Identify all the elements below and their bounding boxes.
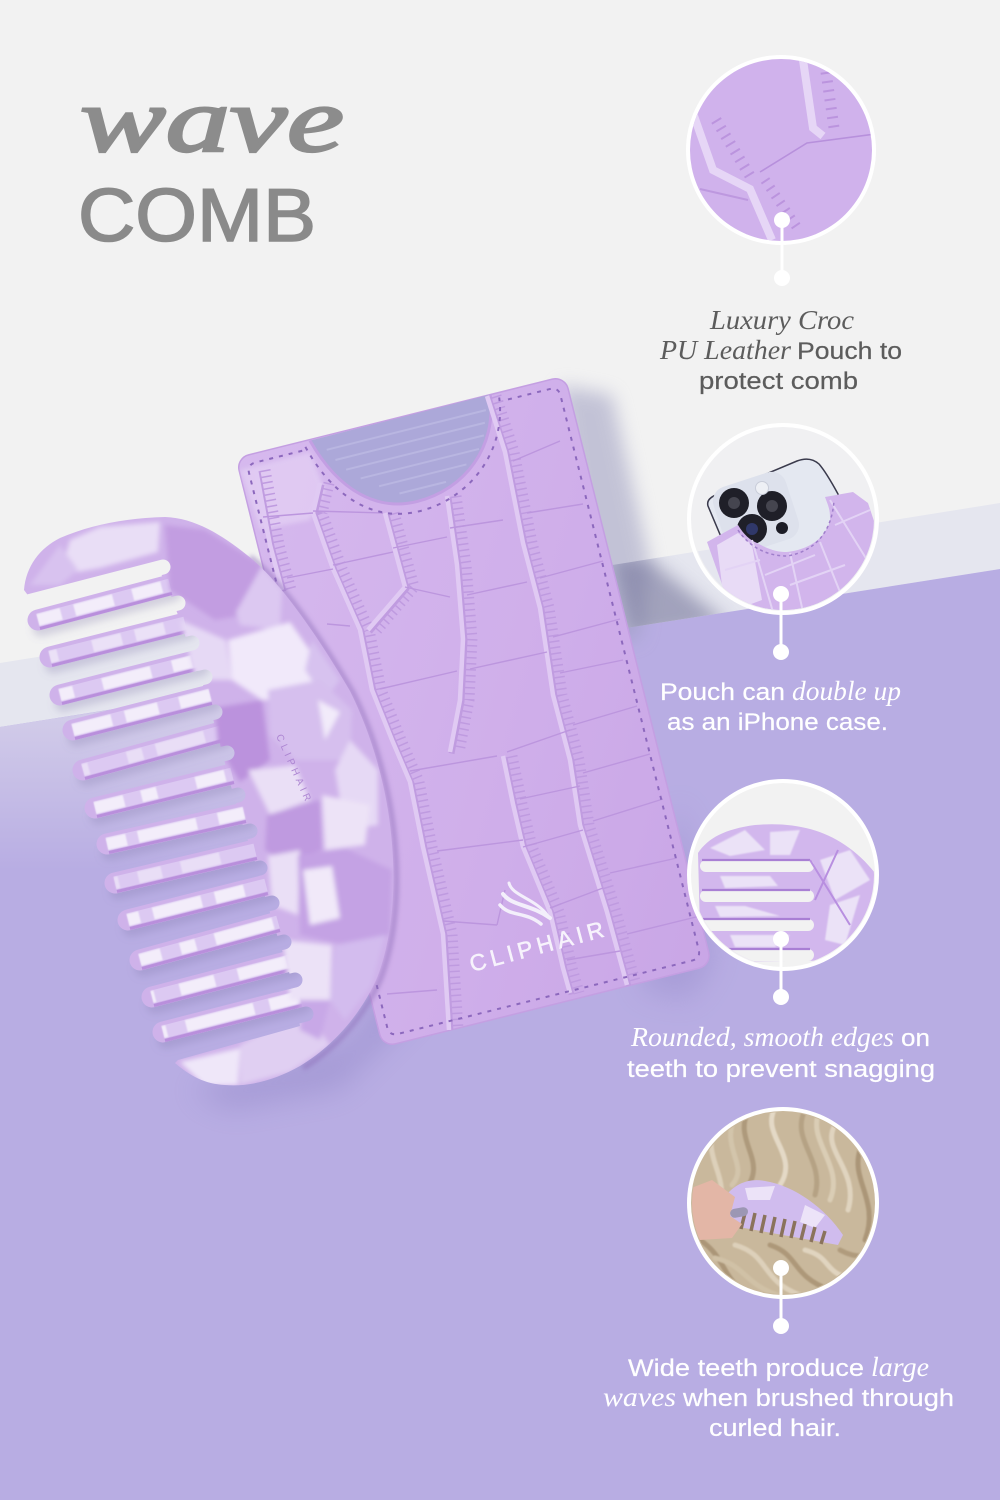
floor highlight at left: [0, 680, 300, 870]
caption text: [660, 676, 901, 736]
caption text: [659, 305, 902, 395]
title: wave: wave: [80, 69, 344, 171]
caption text: Luxury Croc: [709, 305, 854, 335]
comb teeth soft shadow: [41, 593, 303, 1040]
connector line: [774, 212, 790, 286]
logo: brand name: CLIPHAIR: [467, 916, 607, 977]
body marble shards: [30, 522, 392, 1086]
hand: [692, 1180, 742, 1240]
iPhone: [706, 458, 839, 536]
caption text: PU Leather: [659, 335, 792, 365]
caption text: [603, 1352, 954, 1442]
pouch: [236, 376, 712, 1047]
background: white wall: [0, 0, 1000, 760]
caption text: protect comb: [699, 368, 858, 395]
connector line: [773, 1260, 789, 1334]
detail circle: comb in blonde hair: [686, 1107, 880, 1300]
caption text: large: [871, 1352, 929, 1382]
caption text: teeth to prevent snagging: [627, 1056, 935, 1083]
detail circle: comb teeth close-up: [687, 779, 880, 971]
callout 1: croc leather: [659, 55, 902, 395]
comb pearl material: [24, 517, 394, 1086]
hair strands: [700, 1108, 880, 1300]
caption text: as an iPhone case.: [667, 709, 888, 736]
logo: waves: [500, 883, 550, 924]
detail circle: croc leather: [686, 55, 876, 245]
background: wall step band: [0, 503, 1000, 727]
pouch stitching: [246, 383, 701, 1036]
engraved brand text: CLIPHAIR: [273, 733, 313, 803]
detail circle: phone in pouch: [687, 423, 879, 615]
caption text: Rounded, smooth edges: [630, 1022, 894, 1052]
pouch on phone: [707, 492, 877, 615]
connector line: [773, 931, 789, 1005]
background: lavender floor: [0, 569, 1000, 1500]
pouch shadow on step: [613, 557, 728, 628]
comb slots: [741, 1213, 825, 1244]
caption text: Pouch to: [797, 338, 902, 365]
title: COMB: COMB: [78, 173, 316, 257]
caption text: waves: [603, 1382, 676, 1412]
pouch croc texture: [240, 396, 700, 1032]
caption text: Wide teeth produce: [628, 1355, 864, 1382]
comb close-up: [698, 824, 880, 962]
caption text: when brushed through: [682, 1385, 954, 1412]
caption text: curled hair.: [709, 1415, 841, 1442]
caption text: double up: [792, 676, 901, 706]
comb edge shadow: [250, 557, 396, 1068]
pouch fabric notch: [310, 395, 511, 523]
caption text: Pouch can: [660, 679, 785, 706]
callout 3: rounded teeth: [627, 779, 935, 1083]
teeth shading and marble streaks: [40, 594, 302, 1040]
connector line: [773, 586, 789, 660]
comb slots: [706, 866, 808, 955]
callout 2: phone case: [662, 423, 900, 730]
comb: [24, 517, 401, 1086]
comb shadow on floor: [190, 960, 420, 1110]
glossy highlight: [240, 452, 325, 530]
caption text: on: [901, 1025, 930, 1052]
comb in hair: [725, 1180, 843, 1245]
pouch shadow on floor: [640, 800, 715, 1000]
tooth edge shading: [702, 860, 810, 949]
title: [78, 69, 344, 257]
pouch shadow on wall: [560, 385, 650, 640]
callout 4: large waves: [603, 1107, 954, 1442]
pouch body: [236, 376, 712, 1047]
caption text: [627, 1022, 935, 1083]
